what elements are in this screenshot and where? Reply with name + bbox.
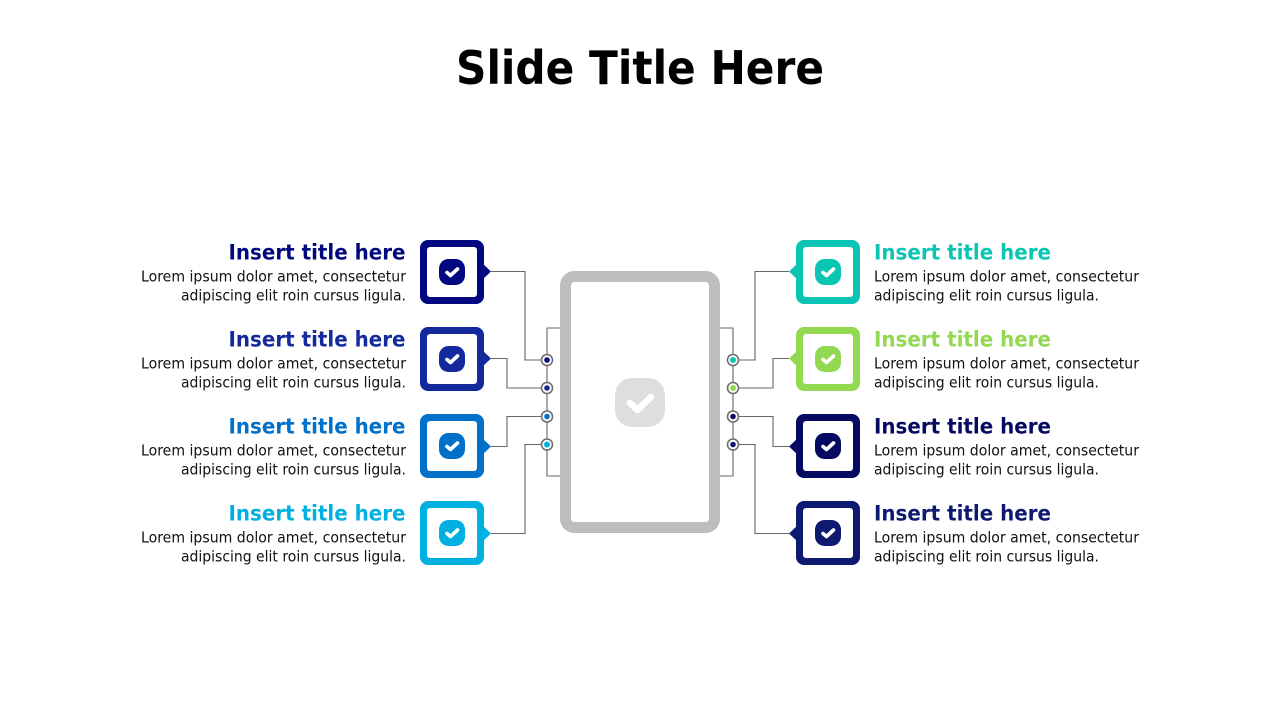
right item 4 bbox=[789, 501, 1140, 566]
text block: Lorem ipsum dolor amet, consectetur bbox=[141, 354, 407, 372]
heading: Insert title here bbox=[874, 328, 1051, 352]
text block: Lorem ipsum dolor amet, consectetur bbox=[141, 442, 407, 460]
icon: central check bbox=[615, 378, 665, 427]
text block bbox=[874, 268, 1140, 304]
text block: adipiscing elit roin cursus ligula. bbox=[874, 286, 1099, 304]
icon: check box bbox=[420, 414, 491, 478]
heading: Insert title here bbox=[228, 240, 406, 266]
panel: central device bbox=[566, 276, 714, 528]
right item 2 bbox=[789, 327, 1140, 392]
left item 3 bbox=[141, 414, 491, 478]
icon: check box bbox=[420, 327, 491, 391]
left connector nodes bbox=[542, 354, 552, 450]
text block bbox=[141, 442, 407, 478]
text block: adipiscing elit roin cursus ligula. bbox=[874, 460, 1099, 478]
right item 3 bbox=[789, 414, 1140, 478]
text block: adipiscing elit roin cursus ligula. bbox=[181, 548, 406, 566]
text block: Lorem ipsum dolor amet, consectetur bbox=[141, 528, 407, 546]
right item 1 bbox=[789, 240, 1140, 304]
text block: adipiscing elit roin cursus ligula. bbox=[181, 286, 406, 304]
icon: check box bbox=[789, 501, 860, 565]
icon: check box bbox=[789, 327, 860, 391]
text block bbox=[874, 354, 1140, 392]
heading: Insert title here bbox=[228, 414, 406, 440]
text block bbox=[141, 354, 407, 392]
icon: check box bbox=[789, 414, 860, 478]
text block: Lorem ipsum dolor amet, consectetur bbox=[874, 528, 1140, 546]
text block: Lorem ipsum dolor amet, consectetur bbox=[874, 354, 1140, 372]
text block: adipiscing elit roin cursus ligula. bbox=[181, 374, 406, 392]
left item 1 bbox=[141, 240, 491, 304]
heading: Insert title here bbox=[874, 414, 1051, 440]
text block: adipiscing elit roin cursus ligula. bbox=[874, 374, 1099, 392]
text block: adipiscing elit roin cursus ligula. bbox=[181, 460, 406, 478]
heading: Insert title here bbox=[228, 328, 406, 352]
text block bbox=[141, 268, 407, 304]
text block bbox=[141, 528, 407, 566]
icon: check box bbox=[789, 240, 860, 304]
text block: adipiscing elit roin cursus ligula. bbox=[874, 548, 1099, 566]
heading: Insert title here bbox=[874, 240, 1051, 266]
title: Slide Title Here bbox=[456, 41, 824, 95]
icon: check box bbox=[420, 501, 491, 565]
text block bbox=[874, 528, 1140, 566]
heading: Insert title here bbox=[874, 502, 1051, 526]
text block: Lorem ipsum dolor amet, consectetur bbox=[874, 268, 1140, 286]
left item 2 bbox=[141, 327, 491, 392]
connector lines bbox=[491, 272, 789, 534]
heading: Insert title here bbox=[228, 502, 406, 526]
icon: check box bbox=[420, 240, 491, 304]
text block bbox=[874, 442, 1140, 478]
text block: Lorem ipsum dolor amet, consectetur bbox=[874, 442, 1140, 460]
text block: Lorem ipsum dolor amet, consectetur bbox=[141, 268, 407, 286]
left item 4 bbox=[141, 501, 491, 566]
right connector nodes bbox=[728, 354, 738, 450]
